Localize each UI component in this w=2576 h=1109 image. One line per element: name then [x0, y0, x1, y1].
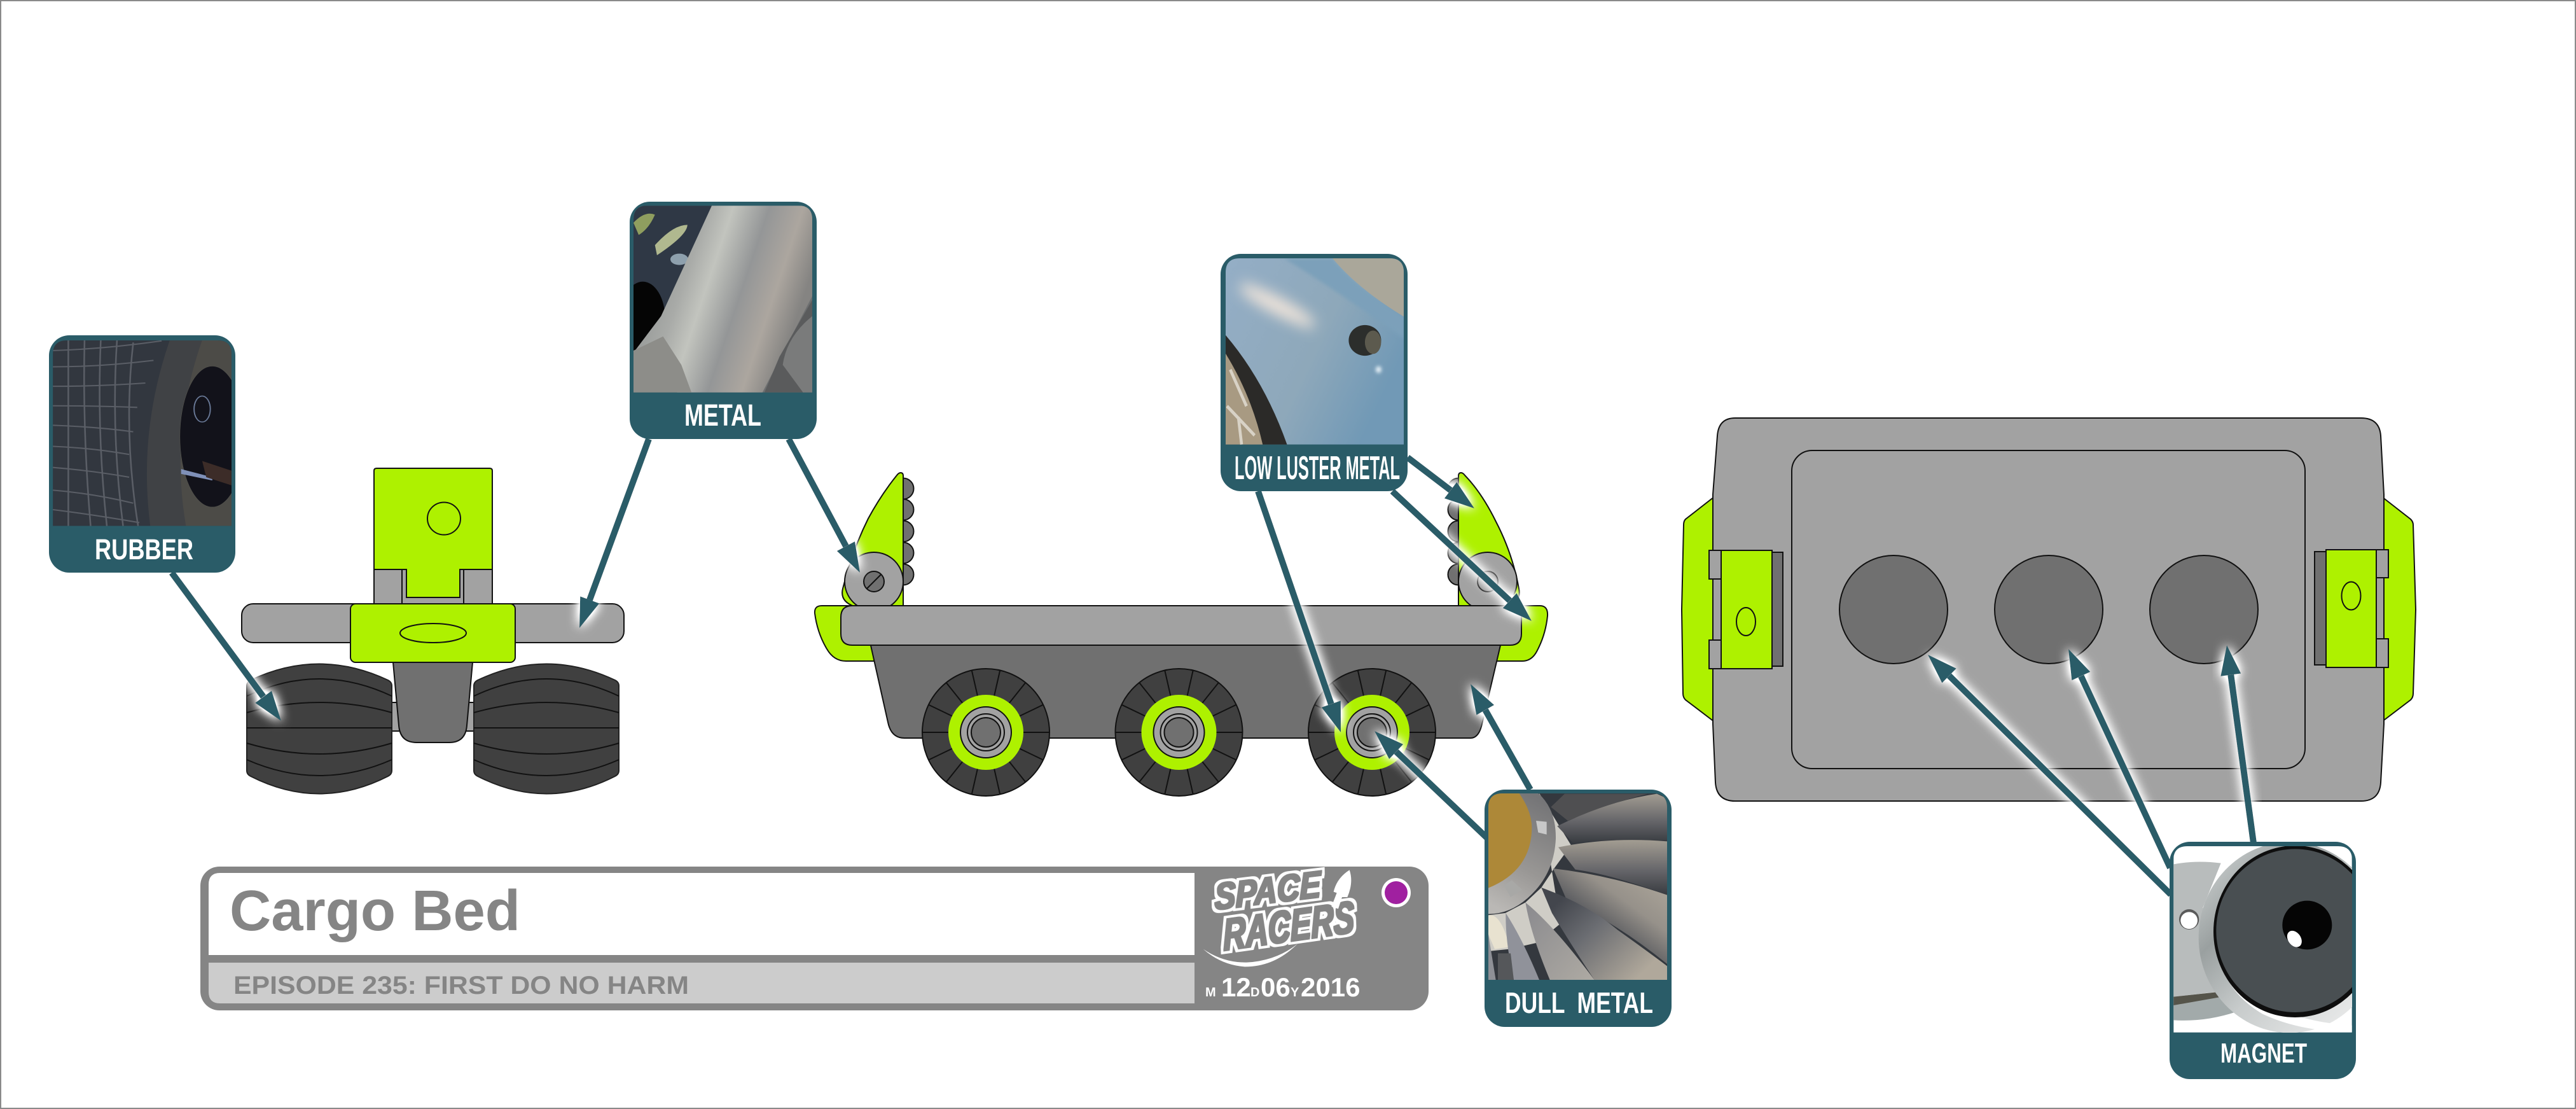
- left hinge bumps: [893, 478, 913, 585]
- side view of the cargo bed: [815, 473, 1548, 796]
- callout card: metal: [621, 202, 817, 439]
- logo: Space Racers: [1203, 863, 1355, 966]
- arrow: magnet to recess 2: [2068, 649, 2170, 868]
- left pivot disc and screw: [845, 552, 903, 611]
- right lime ear: [2379, 494, 2416, 724]
- date: D: [1250, 986, 1259, 1000]
- right clamp: [2315, 550, 2388, 667]
- rear axle: [392, 702, 474, 731]
- callout card: low luster metal: [1221, 254, 1408, 491]
- magnet recess 3: [2150, 555, 2258, 664]
- callout card: rubber: [49, 335, 245, 573]
- label: rubber: RUBBER: [95, 533, 193, 566]
- arrow: dull metal to axle: [1375, 731, 1487, 838]
- arrow: low luster metal to blade: [1408, 457, 1474, 508]
- left lime blade: [842, 473, 903, 606]
- photo: tyre: [53, 340, 245, 526]
- lime centre block: [350, 604, 515, 662]
- date: 06: [1261, 972, 1291, 1002]
- right pivot disc and screw: [1458, 552, 1517, 611]
- title: Cargo Bed: [230, 879, 520, 943]
- top view of the cargo bed: [1682, 418, 2416, 801]
- arrow: low luster metal to wheel hub: [1258, 491, 1341, 732]
- arrow: magnet to recess 3: [2220, 645, 2254, 843]
- magnet recess 2: [1995, 555, 2103, 664]
- date: Y: [1291, 986, 1299, 1000]
- arrow: metal to bar: [579, 439, 649, 628]
- arrow: low luster metal to fender: [1392, 491, 1532, 621]
- wheel 1: [922, 669, 1049, 796]
- right lime side fender: [1482, 606, 1548, 661]
- magnet recess 1: [1839, 555, 1948, 664]
- right front-view wheel: [474, 664, 619, 794]
- date: 2016: [1301, 972, 1360, 1002]
- title field: [209, 873, 1195, 955]
- left lime side fender: [815, 606, 890, 661]
- tray outline: [1713, 418, 2384, 801]
- status dot: [1381, 878, 1411, 907]
- photo: ring magnets: [2173, 846, 2352, 1033]
- rear bracket: [374, 569, 492, 605]
- cargo body: [870, 643, 1501, 738]
- episode line: EPISODE 235: FIRST DO NO HARM: [233, 972, 689, 1000]
- arrow: metal to pivot: [789, 439, 860, 573]
- label: metal: METAL: [684, 399, 761, 433]
- logo: Space Racers: SPACE: [1214, 863, 1322, 918]
- right hinge bumps: [1448, 478, 1469, 585]
- arrow: magnet to recess 1: [1928, 655, 2171, 895]
- label: magnet: MAGNET: [2220, 1038, 2307, 1069]
- callout card: dull metal: [1485, 790, 1672, 1027]
- episode field: [209, 963, 1195, 1003]
- deck: [841, 606, 1521, 645]
- arrow: dull metal to body: [1471, 684, 1530, 790]
- callout card: low luster metal: LOW LUSTER METAL: [1235, 450, 1400, 487]
- front view of the cargo bed: [242, 468, 624, 794]
- left front-view wheel: [247, 664, 392, 794]
- title plate: [200, 863, 1429, 1010]
- wheel 2: [1116, 669, 1243, 796]
- right lime blade: [1458, 473, 1520, 606]
- arrow: rubber to front wheel: [172, 573, 281, 721]
- date: M: [1205, 986, 1216, 1000]
- centre strut: [393, 662, 473, 743]
- left clamp: [1709, 550, 1783, 669]
- photo: turbine blades: [1488, 793, 1667, 980]
- lime upright plate: [374, 468, 492, 597]
- wheel 3: [1308, 669, 1436, 796]
- date: 12: [1221, 972, 1251, 1002]
- photo: metal tube: [621, 206, 812, 393]
- photo: low luster panel: [1226, 258, 1404, 445]
- left lime ear: [1682, 494, 1717, 724]
- label: dull metal: DULL METAL: [1505, 986, 1653, 1019]
- logo: Space Racers: RACERS: [1222, 891, 1355, 960]
- horizontal grey bar: [242, 604, 624, 643]
- callout card: magnet: [2170, 842, 2356, 1079]
- inner tray: [1792, 450, 2305, 769]
